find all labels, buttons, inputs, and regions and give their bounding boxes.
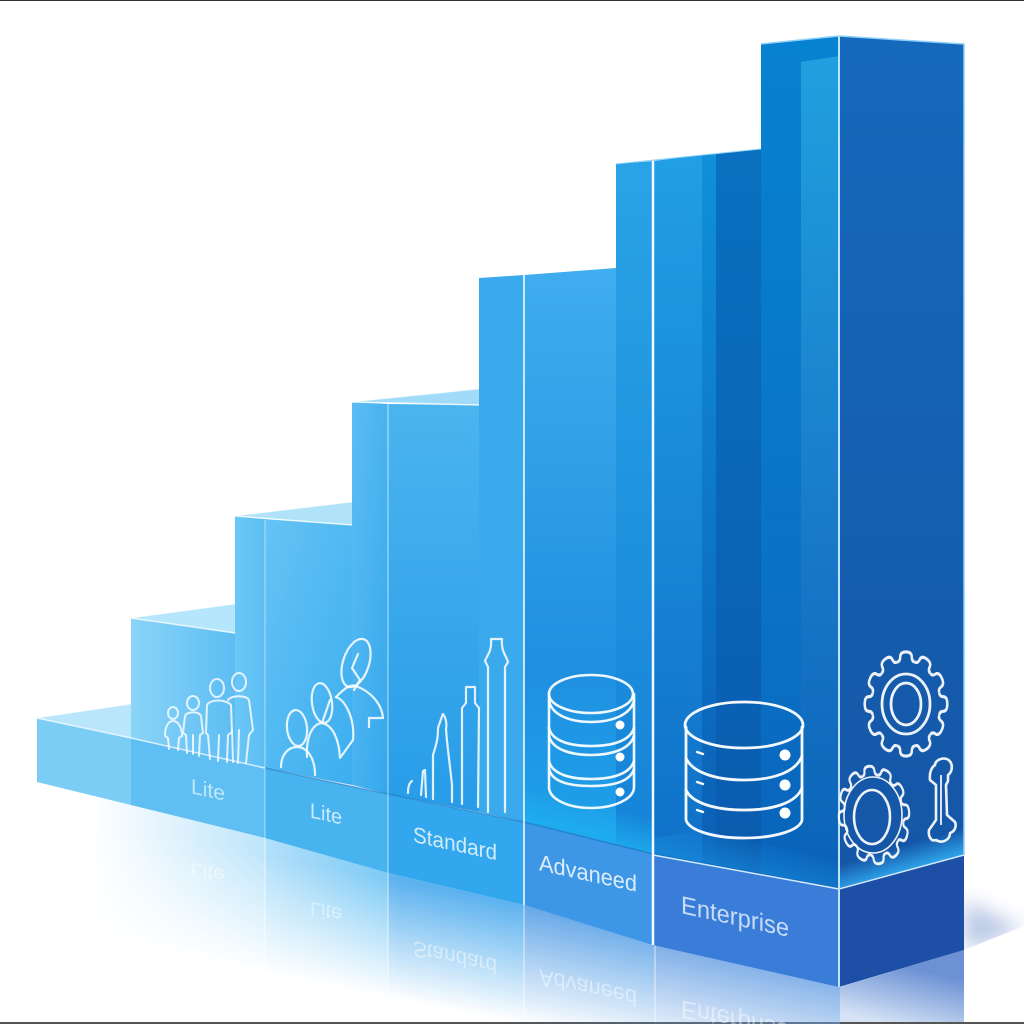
icon: family of people bbox=[165, 673, 253, 763]
reflected labels: Lite bbox=[310, 897, 342, 925]
label: Enterprise: Enterprise bbox=[681, 891, 789, 943]
top face: step 1 bbox=[131, 604, 235, 633]
icon: growth bars bbox=[408, 639, 508, 812]
floor: enterprise tier bbox=[653, 830, 839, 888]
top face: step 3 bbox=[352, 389, 479, 405]
label: Advaneed: Advaneed bbox=[539, 849, 637, 897]
reflected labels: Advaneed bbox=[539, 964, 637, 1012]
icon: large database bbox=[685, 702, 803, 838]
column: step 2 bbox=[265, 519, 352, 785]
base strip: side face bbox=[839, 855, 964, 987]
base strip: advanced bbox=[524, 822, 653, 945]
icon: small gear bbox=[834, 763, 914, 867]
icon: group of busts bbox=[281, 635, 383, 775]
base strip: lite 2 bbox=[265, 768, 388, 873]
floor glow: advanced tier bbox=[524, 785, 653, 854]
column: tallest front bbox=[761, 36, 839, 888]
column: step 5 band bbox=[702, 154, 716, 866]
database lights bbox=[780, 750, 790, 818]
base strip: enterprise bbox=[653, 854, 839, 987]
column: step 1 bbox=[131, 618, 235, 762]
reflected labels: Standard bbox=[413, 936, 497, 979]
column: step 5 bbox=[653, 155, 702, 864]
column: tallest side face bbox=[839, 36, 964, 888]
database lights bbox=[616, 720, 624, 796]
floor shadow bbox=[964, 900, 1024, 985]
label: Lite: Lite bbox=[191, 774, 225, 806]
column: step 3 left bbox=[352, 402, 388, 794]
label: Lite: Lite bbox=[310, 799, 342, 829]
column: step 5 left bbox=[616, 161, 653, 854]
top face: step 2 bbox=[235, 502, 352, 525]
label: Standard: Standard bbox=[413, 822, 497, 865]
column: step 2 left bbox=[235, 516, 265, 768]
reflected labels bbox=[191, 857, 789, 1024]
icon: small database bbox=[549, 675, 634, 808]
column: step 3 bbox=[388, 404, 479, 812]
reflection on floor bbox=[114, 801, 964, 1024]
base strip: lite 1 bbox=[131, 738, 265, 838]
floor glow: side face bbox=[839, 830, 964, 888]
column: tallest highlight bbox=[801, 56, 839, 888]
base strip: standard bbox=[388, 794, 524, 905]
icon: large gear bbox=[865, 652, 947, 756]
reflected column colours bbox=[114, 801, 840, 1024]
column: step 5 dark bbox=[716, 149, 761, 874]
reflection: right face bbox=[840, 950, 964, 1022]
column: step 4 bbox=[524, 268, 616, 845]
reflected labels: Lite bbox=[191, 857, 225, 887]
base top surface bbox=[37, 704, 131, 738]
column: step 4 left bbox=[479, 275, 524, 822]
base strip: lite 1 left bbox=[37, 718, 131, 805]
icon: wrench bbox=[929, 759, 956, 842]
